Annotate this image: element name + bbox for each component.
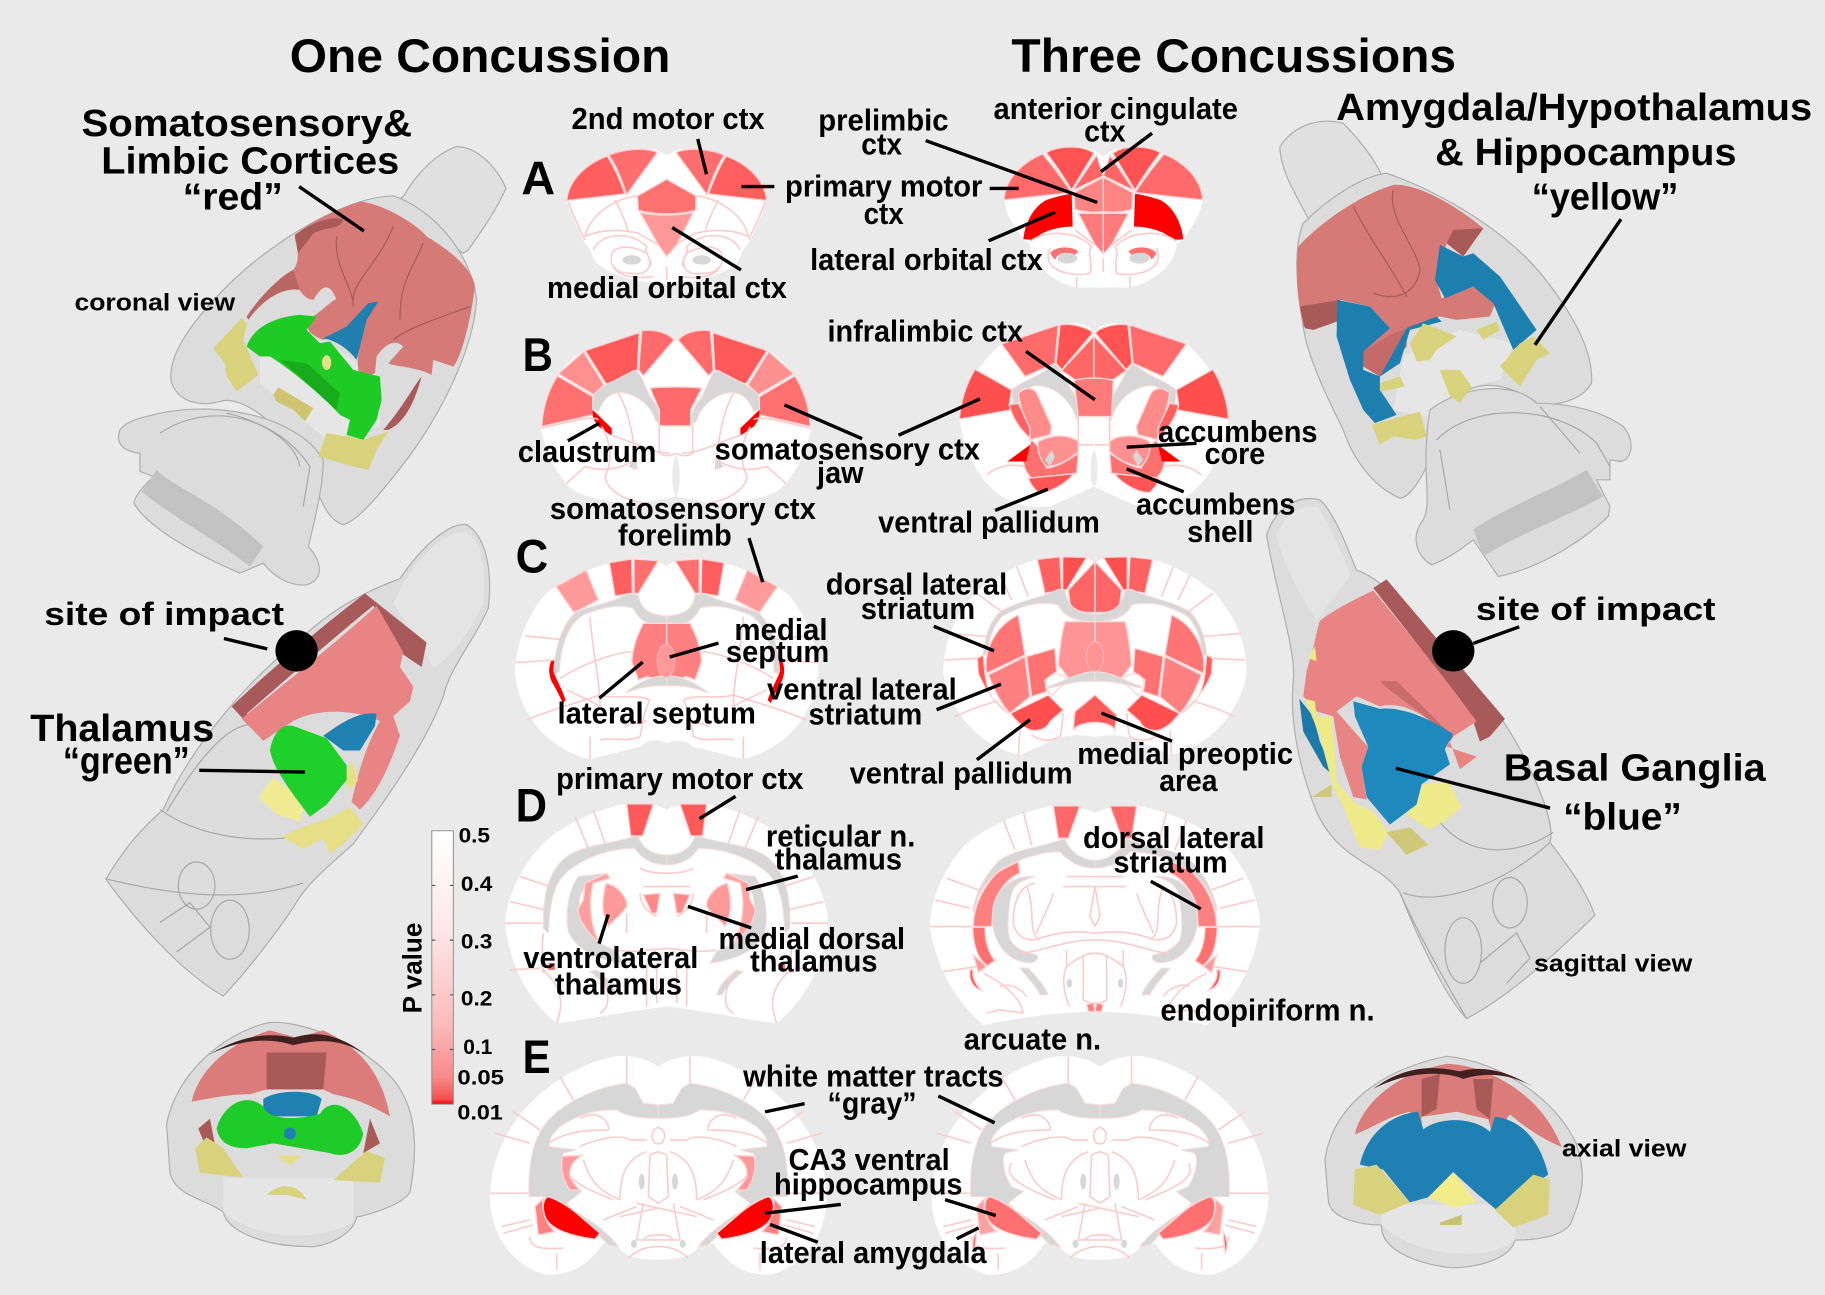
label: sagittal view: sagittal view [1534,951,1693,978]
label: CA3 ventral hippocampus: CA3 ventral [789,1144,950,1177]
label: anterior cingulate ctx: anterior cingulate [994,93,1238,126]
colour bar legend: P value: P value [397,923,427,1013]
heading: amygdala hypothalamus hippocampus yellow: “yellow” [1532,175,1678,218]
heading: basal ganglia blue: Basal Ganglia [1504,747,1766,790]
label: accumbens shell [1127,469,1295,549]
label: accumbens core: accumbens [1158,416,1318,449]
panel letter D: D [516,779,547,832]
label: infralimbic ctx [828,315,1095,400]
label: ventral lateral striatum: striatum [809,699,922,732]
label: white matter tracts gray [742,1060,1004,1123]
label: primary motor ctx [741,171,1019,231]
heading: somatosensory and limbic cortices red: “red” [183,175,283,218]
colour bar legend: P value: 0.05 [457,1066,504,1089]
label: medial dorsal thalamus: medial dorsal [718,923,905,956]
slice D right [930,805,1260,1025]
brain: coronal view, three concussions [1280,121,1631,576]
label: CA3 ventral hippocampus: hippocampus [774,1168,963,1201]
label: ventral pallidum, panel B: ventral pallidum [878,506,1100,539]
slice E left [490,1056,827,1275]
panel letter A: A [521,152,555,205]
label: accumbens core [1127,416,1318,471]
brain: sagittal view, one concussion [106,524,490,996]
heading: thalamus green: “green” [63,740,190,783]
heading: basal ganglia blue [1396,747,1766,839]
label: medial preoptic area: medial preoptic [1077,738,1293,771]
label: ventrolateral thalamus: ventrolateral [523,942,698,975]
panel letter C: C [516,530,548,583]
label: primary motor ctx, panel D: primary motor ctx [556,763,804,796]
label: axial view: axial view [1562,1136,1688,1163]
colour bar legend: P value: 0.2 [461,987,492,1010]
slice A right [1004,147,1203,288]
label: prelimbic ctx [818,104,1097,202]
label: reticular n. thalamus: thalamus [775,844,902,877]
colour bar legend: P value: 0.1 [463,1036,493,1059]
label: medial preoptic area [1077,713,1293,798]
label: lateral amygdala: lateral amygdala [760,1237,988,1270]
label: medial dorsal thalamus [688,906,905,978]
label: arcuate n.: arcuate n. [964,1024,1101,1056]
label: lateral septum [558,662,756,731]
label: medial preoptic area: area [1159,765,1219,798]
heading: thalamus green [30,707,305,783]
brain: sagittal view, three concussions [1267,499,1595,1019]
label: dorsal lateral striatum, panel D: striatum [1113,846,1228,879]
label: somatosensory ctx forelimb: forelimb [618,520,732,553]
label: reticular n. thalamus: reticular n. [766,820,915,853]
callout: site of impact, one concussion [44,596,318,672]
colour bar legend: P value [397,824,504,1124]
label: primary motor ctx: primary motor [785,171,983,204]
heading: somatosensory and limbic cortices red: Somatosensory& [81,102,412,145]
colour bar legend: P value: 0.01 [457,1101,503,1124]
label: white matter tracts gray: “gray” [828,1087,917,1120]
label: primary motor ctx, panel D [556,763,804,819]
slice C left [515,558,818,759]
colour bar legend: P value: 0.4 [461,873,493,896]
label: somatosensory ctx forelimb [550,493,816,582]
colour bar legend: P value: 0.3 [461,930,492,953]
slice B right [959,323,1229,507]
heading: amygdala hypothalamus hippocampus yellow [1336,86,1812,345]
label: dorsal lateral striatum, panel D [1083,822,1264,909]
heading: basal ganglia blue: “blue” [1563,796,1682,839]
label: accumbens shell: accumbens [1136,488,1295,521]
label: somatosensory ctx jaw [715,399,980,490]
slice D left [505,804,828,1023]
label: CA3 ventral hippocampus [765,1144,996,1216]
label: dorsal lateral striatum, panel C [826,569,1007,651]
label: accumbens core: core [1205,438,1265,471]
label: dorsal lateral striatum, panel C: dorsal lateral [826,569,1007,602]
label: anterior cingulate ctx: ctx [1084,116,1126,149]
label: ventral lateral striatum [767,673,1001,732]
brain: axial view, one concussion [167,1022,415,1247]
label: ventrolateral thalamus: thalamus [555,969,682,1002]
label: anterior cingulate ctx [994,93,1238,172]
label: 2nd motor ctx [571,103,765,174]
callout: site of impact, one concussion: site of impact [44,596,284,632]
label: white matter tracts gray: white matter tracts [742,1060,1004,1093]
label: medial dorsal thalamus: thalamus [750,945,878,978]
panel letter B: B [523,329,553,382]
slice B left [541,330,811,504]
heading: somatosensory and limbic cortices red: Limbic Cortices [101,139,399,182]
panel letter E: E [523,1031,551,1084]
heading: thalamus green: Thalamus [30,707,214,750]
label: ventral pallidum, panel C: ventral pallidum [850,758,1073,791]
heading: amygdala hypothalamus hippocampus yellow: Amygdala/Hypothalamus [1336,86,1812,129]
brain: axial view, three concussions [1325,1056,1582,1268]
label: medial orbital ctx [547,228,787,305]
label: medial orbital ctx: medial orbital ctx [547,272,787,305]
label: medial septum: septum [726,636,829,669]
label: claustrum [518,423,656,469]
title: Three Concussions: Three Concussions [1011,30,1456,83]
slice E right [932,1056,1268,1275]
heading: amygdala hypothalamus hippocampus yellow: & Hippocampus [1435,131,1737,174]
label: somatosensory ctx jaw: somatosensory ctx [715,434,980,467]
label: ventral lateral striatum: ventral lateral [767,673,957,706]
callout: site of impact, three concussions: site of impact [1476,591,1716,627]
label: accumbens shell: shell [1187,516,1254,549]
label: lateral orbital ctx: lateral orbital ctx [810,244,1043,277]
label: medial septum [670,614,829,669]
label: infralimbic ctx: infralimbic ctx [828,315,1023,348]
colour bar legend: P value: 0.5 [459,824,490,847]
label: somatosensory ctx jaw: jaw [816,457,864,490]
label: endopiriform n.: endopiriform n. [1160,994,1375,1027]
label: coronal view: coronal view [74,290,236,317]
label: somatosensory ctx forelimb: somatosensory ctx [550,493,816,526]
label: prelimbic ctx: ctx [861,129,902,162]
heading: somatosensory and limbic cortices red [81,102,412,231]
label: 2nd motor ctx: 2nd motor ctx [571,103,765,136]
brain: coronal view, one concussion [119,147,506,585]
label: dorsal lateral striatum, panel D: dorsal lateral [1083,822,1264,855]
label: ventrolateral thalamus [523,915,698,1002]
label: ventral pallidum, panel C [850,720,1073,791]
label: lateral septum: lateral septum [558,698,756,731]
label: prelimbic ctx: prelimbic [818,104,949,137]
label: reticular n. thalamus [746,820,915,890]
label: ventral pallidum, panel B [878,489,1100,539]
label: medial septum: medial [734,614,828,647]
label: dorsal lateral striatum, panel C: striatum [861,593,975,626]
label: primary motor ctx: ctx [864,198,904,231]
slice C right [943,556,1247,757]
title: One Concussion: One Concussion [290,30,670,83]
label: claustrum: claustrum [518,436,656,469]
callout: site of impact, three concussions [1432,591,1716,672]
label: lateral orbital ctx [810,212,1055,277]
slice A left [567,149,767,283]
